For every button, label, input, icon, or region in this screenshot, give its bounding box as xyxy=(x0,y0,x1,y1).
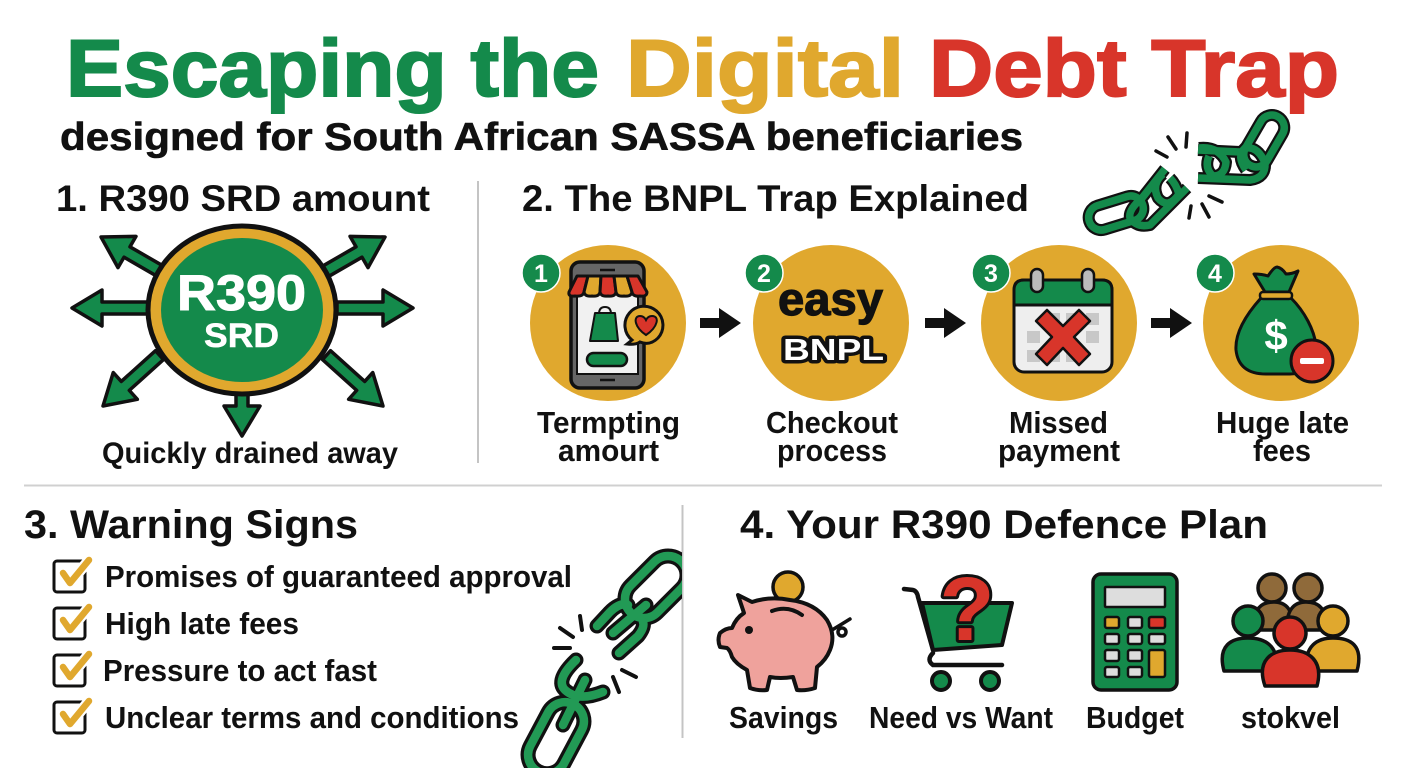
subtitle: designed for South African SASSA beneficiaries xyxy=(60,116,1023,159)
label 3: Missed xyxy=(1009,406,1108,440)
icon: cart with question mark xyxy=(904,560,1012,690)
badge 1: 1 xyxy=(534,260,548,288)
badge 2: 2 xyxy=(757,260,771,288)
label 2: Checkout xyxy=(766,406,898,440)
label: budget: Budget xyxy=(1086,701,1184,735)
icon: piggy bank xyxy=(718,572,850,690)
label 3 xyxy=(998,406,1120,468)
label 4: Huge late xyxy=(1216,406,1349,440)
heading: section 2: 2. The BNPL Trap Explained xyxy=(522,178,1029,219)
icon: group of people xyxy=(1222,574,1359,686)
label 2 xyxy=(766,406,898,468)
heading: section 1: 1. R390 SRD amount xyxy=(56,178,430,219)
text: easy: easy xyxy=(778,273,883,325)
item 4: Unclear terms and conditions xyxy=(105,700,519,735)
icon: money bag xyxy=(1236,267,1333,382)
step 2: checkout process xyxy=(745,245,909,468)
badge 3: 3 xyxy=(984,260,998,288)
icon: R390 coin: SRD xyxy=(204,317,279,355)
panel: defence plan xyxy=(718,560,1359,735)
badge 1 xyxy=(522,254,560,292)
heading: section 3: 3. Warning Signs xyxy=(24,503,358,547)
item: savings xyxy=(718,572,850,735)
title: Debt Trap xyxy=(929,24,1339,114)
icon: phone shop xyxy=(569,262,663,388)
icon: R390 coin xyxy=(148,226,336,394)
label 1 xyxy=(537,406,680,468)
label 4: fees xyxy=(1253,434,1311,468)
step 1: tempting amount xyxy=(522,245,686,468)
arrow 3 to 4 xyxy=(1151,308,1192,338)
step 4: huge late fees xyxy=(1196,245,1359,468)
item: need vs want xyxy=(869,560,1053,735)
icon: cart with question mark: ? xyxy=(940,560,994,660)
label: stokvel: stokvel xyxy=(1241,701,1340,735)
icon: calendar xyxy=(1014,269,1112,372)
label: need vs want: Need vs Want xyxy=(869,701,1053,735)
label 1: Termpting xyxy=(537,406,680,440)
caption: drained: Quickly drained away xyxy=(102,437,398,470)
icon: outward arrows xyxy=(72,221,413,436)
icon: money bag: $ xyxy=(1264,312,1288,359)
label: savings: Savings xyxy=(729,701,838,735)
badge 4: 4 xyxy=(1208,260,1222,288)
badge 4 xyxy=(1196,254,1234,292)
icon: broken chain bottom xyxy=(521,548,695,768)
label 4 xyxy=(1216,406,1349,468)
panel: warning signs checklist xyxy=(54,559,572,735)
step 3: missed payment xyxy=(972,245,1137,468)
arrow 1 to 2 xyxy=(700,308,741,338)
heading: section 4: 4. Your R390 Defence Plan xyxy=(740,503,1268,547)
item 1: Promises of guaranteed approval xyxy=(105,559,572,594)
label 2: process xyxy=(777,434,887,468)
label 3: payment xyxy=(998,434,1120,468)
arrow 2 to 3 xyxy=(925,308,966,338)
title: Escaping the xyxy=(66,24,599,114)
panel: R390 drained diagram xyxy=(72,221,413,436)
badge 2 xyxy=(745,254,783,292)
icon: broken chain top xyxy=(1086,111,1289,233)
title: Digital xyxy=(626,24,904,114)
title xyxy=(66,24,1339,114)
item: stokvel xyxy=(1222,574,1359,735)
label 1: amourt xyxy=(558,434,659,468)
panel: BNPL steps xyxy=(522,245,1359,468)
item 3: Pressure to act fast xyxy=(103,653,377,688)
item 2: High late fees xyxy=(105,606,299,641)
text: BNPL: BNPL xyxy=(783,332,884,367)
icon: calculator xyxy=(1093,574,1177,690)
item: budget xyxy=(1086,574,1184,735)
badge 3 xyxy=(972,254,1010,292)
icon: R390 coin: R390 xyxy=(177,265,306,321)
